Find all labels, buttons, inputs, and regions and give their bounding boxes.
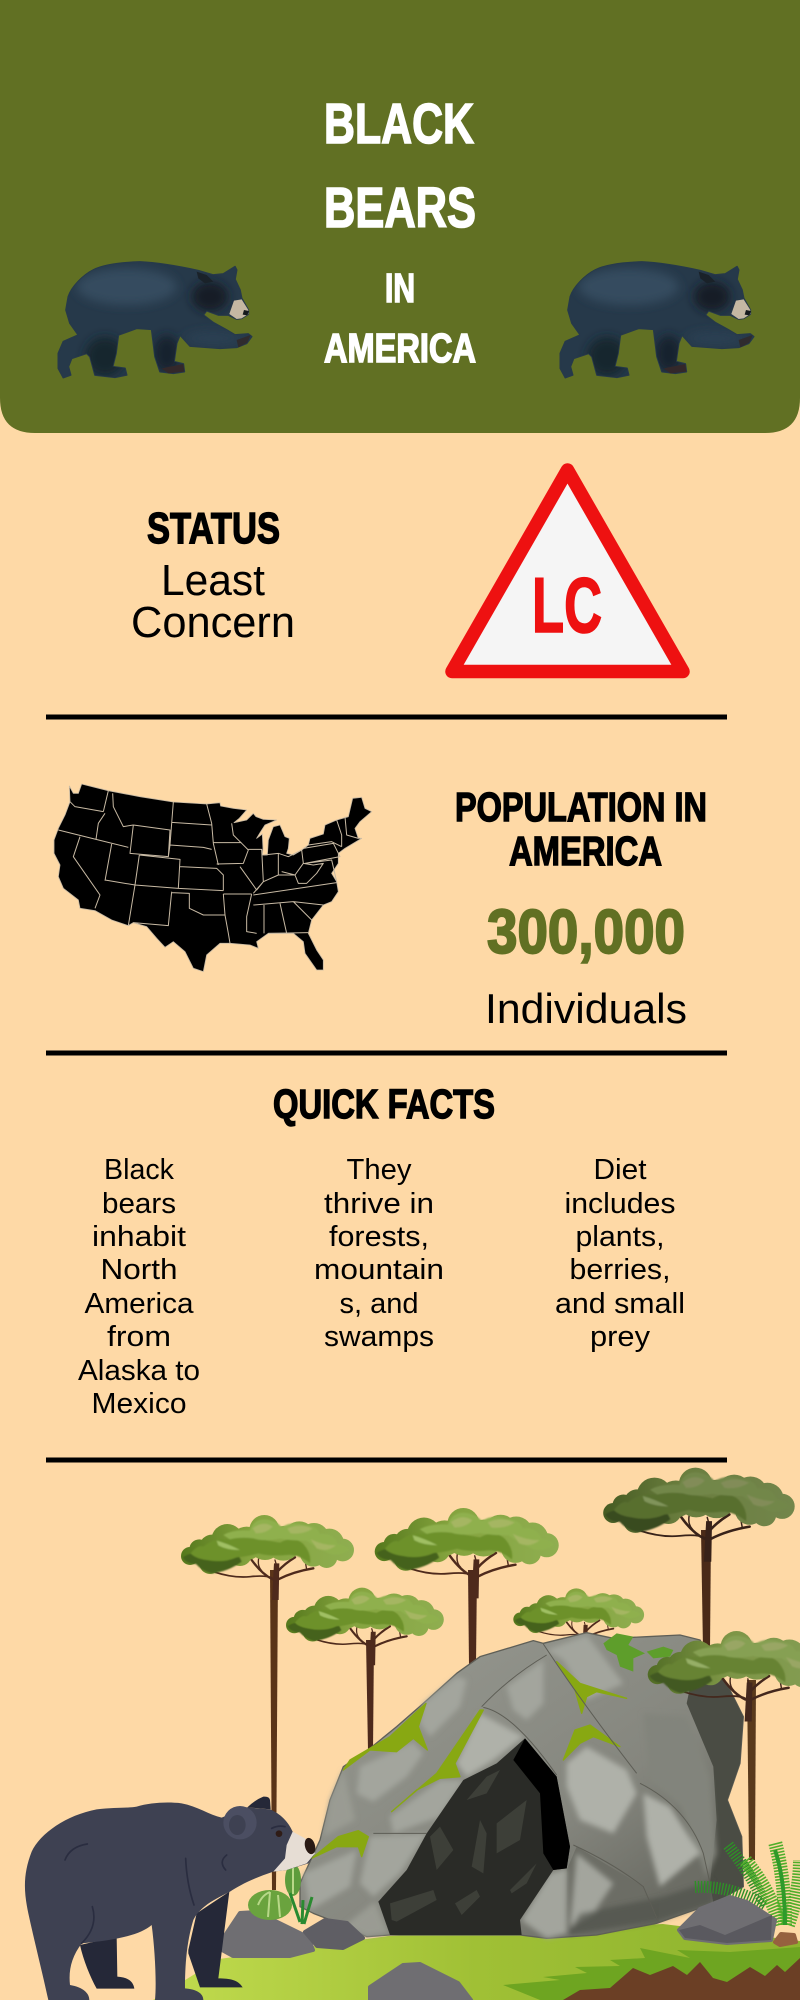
header banner — [0, 0, 800, 433]
fact column 3: plants, — [576, 1221, 664, 1253]
fact column 1: North — [100, 1254, 178, 1286]
title: AMERICA — [324, 325, 476, 371]
far legs — [80, 1892, 243, 1989]
tree 5 — [603, 1468, 795, 1562]
fact column 3: Diet — [594, 1154, 647, 1186]
tree 3 — [286, 1588, 444, 1665]
nose — [303, 1837, 317, 1855]
far ear — [247, 1797, 271, 1809]
fact column 1: from — [107, 1321, 171, 1353]
fact column 3: prey — [590, 1321, 651, 1353]
muzzle — [273, 1832, 315, 1872]
fact column 2 — [314, 1154, 444, 1353]
bear body — [25, 1803, 315, 2000]
title: BLACK — [324, 92, 474, 156]
quick facts heading: QUICK FACTS — [273, 1081, 495, 1127]
population heading: POPULATION IN — [455, 784, 707, 830]
population number: 300,000 — [487, 898, 685, 967]
fact column 2: They — [346, 1154, 412, 1186]
bear photo right — [560, 262, 754, 378]
title — [324, 92, 476, 371]
individuals label: Individuals — [485, 985, 687, 1032]
status value — [131, 556, 295, 647]
fact column 3: berries, — [570, 1254, 670, 1286]
ground — [153, 1924, 800, 2000]
fact column 2: s, and — [340, 1288, 418, 1320]
leaves on cave top — [603, 1633, 673, 1672]
fact column 1: bears — [102, 1188, 176, 1220]
tree 4 — [513, 1588, 644, 1653]
fern — [694, 1842, 800, 1925]
fact column 3 — [555, 1154, 685, 1353]
eye — [276, 1830, 282, 1837]
bear photo left — [58, 262, 252, 378]
striped plant — [248, 1864, 312, 1924]
near ear — [223, 1806, 257, 1839]
population heading — [455, 784, 707, 874]
cave opening — [378, 1738, 570, 1935]
tree 1 — [181, 1515, 354, 1600]
tree 6 — [648, 1631, 800, 1722]
least concern triangle icon — [452, 470, 683, 672]
fact column 1: inhabit — [92, 1221, 186, 1253]
US map — [54, 784, 372, 972]
fact column 3: and small — [555, 1288, 685, 1320]
fact column 2: forests, — [329, 1221, 429, 1253]
tree 2 — [375, 1508, 559, 1598]
fact column 2: mountain — [314, 1254, 444, 1286]
fact column 1: Mexico — [92, 1388, 186, 1420]
tree trunks behind cave — [270, 1530, 711, 1890]
fact column 1: America — [84, 1288, 194, 1320]
cave — [300, 1633, 743, 1938]
status value: Concern — [131, 598, 295, 647]
status heading: STATUS — [147, 504, 280, 553]
rocks — [222, 1897, 796, 2000]
fact column 1: Alaska to — [78, 1355, 200, 1387]
moss patches — [312, 1662, 627, 1858]
tree 6 trunk — [747, 1680, 756, 1860]
status value: Least — [161, 556, 265, 605]
fact column 2: swamps — [324, 1321, 434, 1353]
fact column 1: Black — [104, 1154, 175, 1186]
cartoon bear — [25, 1797, 317, 2000]
least concern triangle icon: LC — [532, 561, 602, 649]
title: IN — [385, 265, 415, 311]
fact column 3: includes — [564, 1188, 676, 1220]
population heading: AMERICA — [509, 828, 662, 874]
fact column 1 — [78, 1154, 200, 1420]
fact column 2: thrive in — [324, 1188, 434, 1220]
title: BEARS — [324, 176, 476, 240]
fur creases — [65, 1826, 285, 1943]
